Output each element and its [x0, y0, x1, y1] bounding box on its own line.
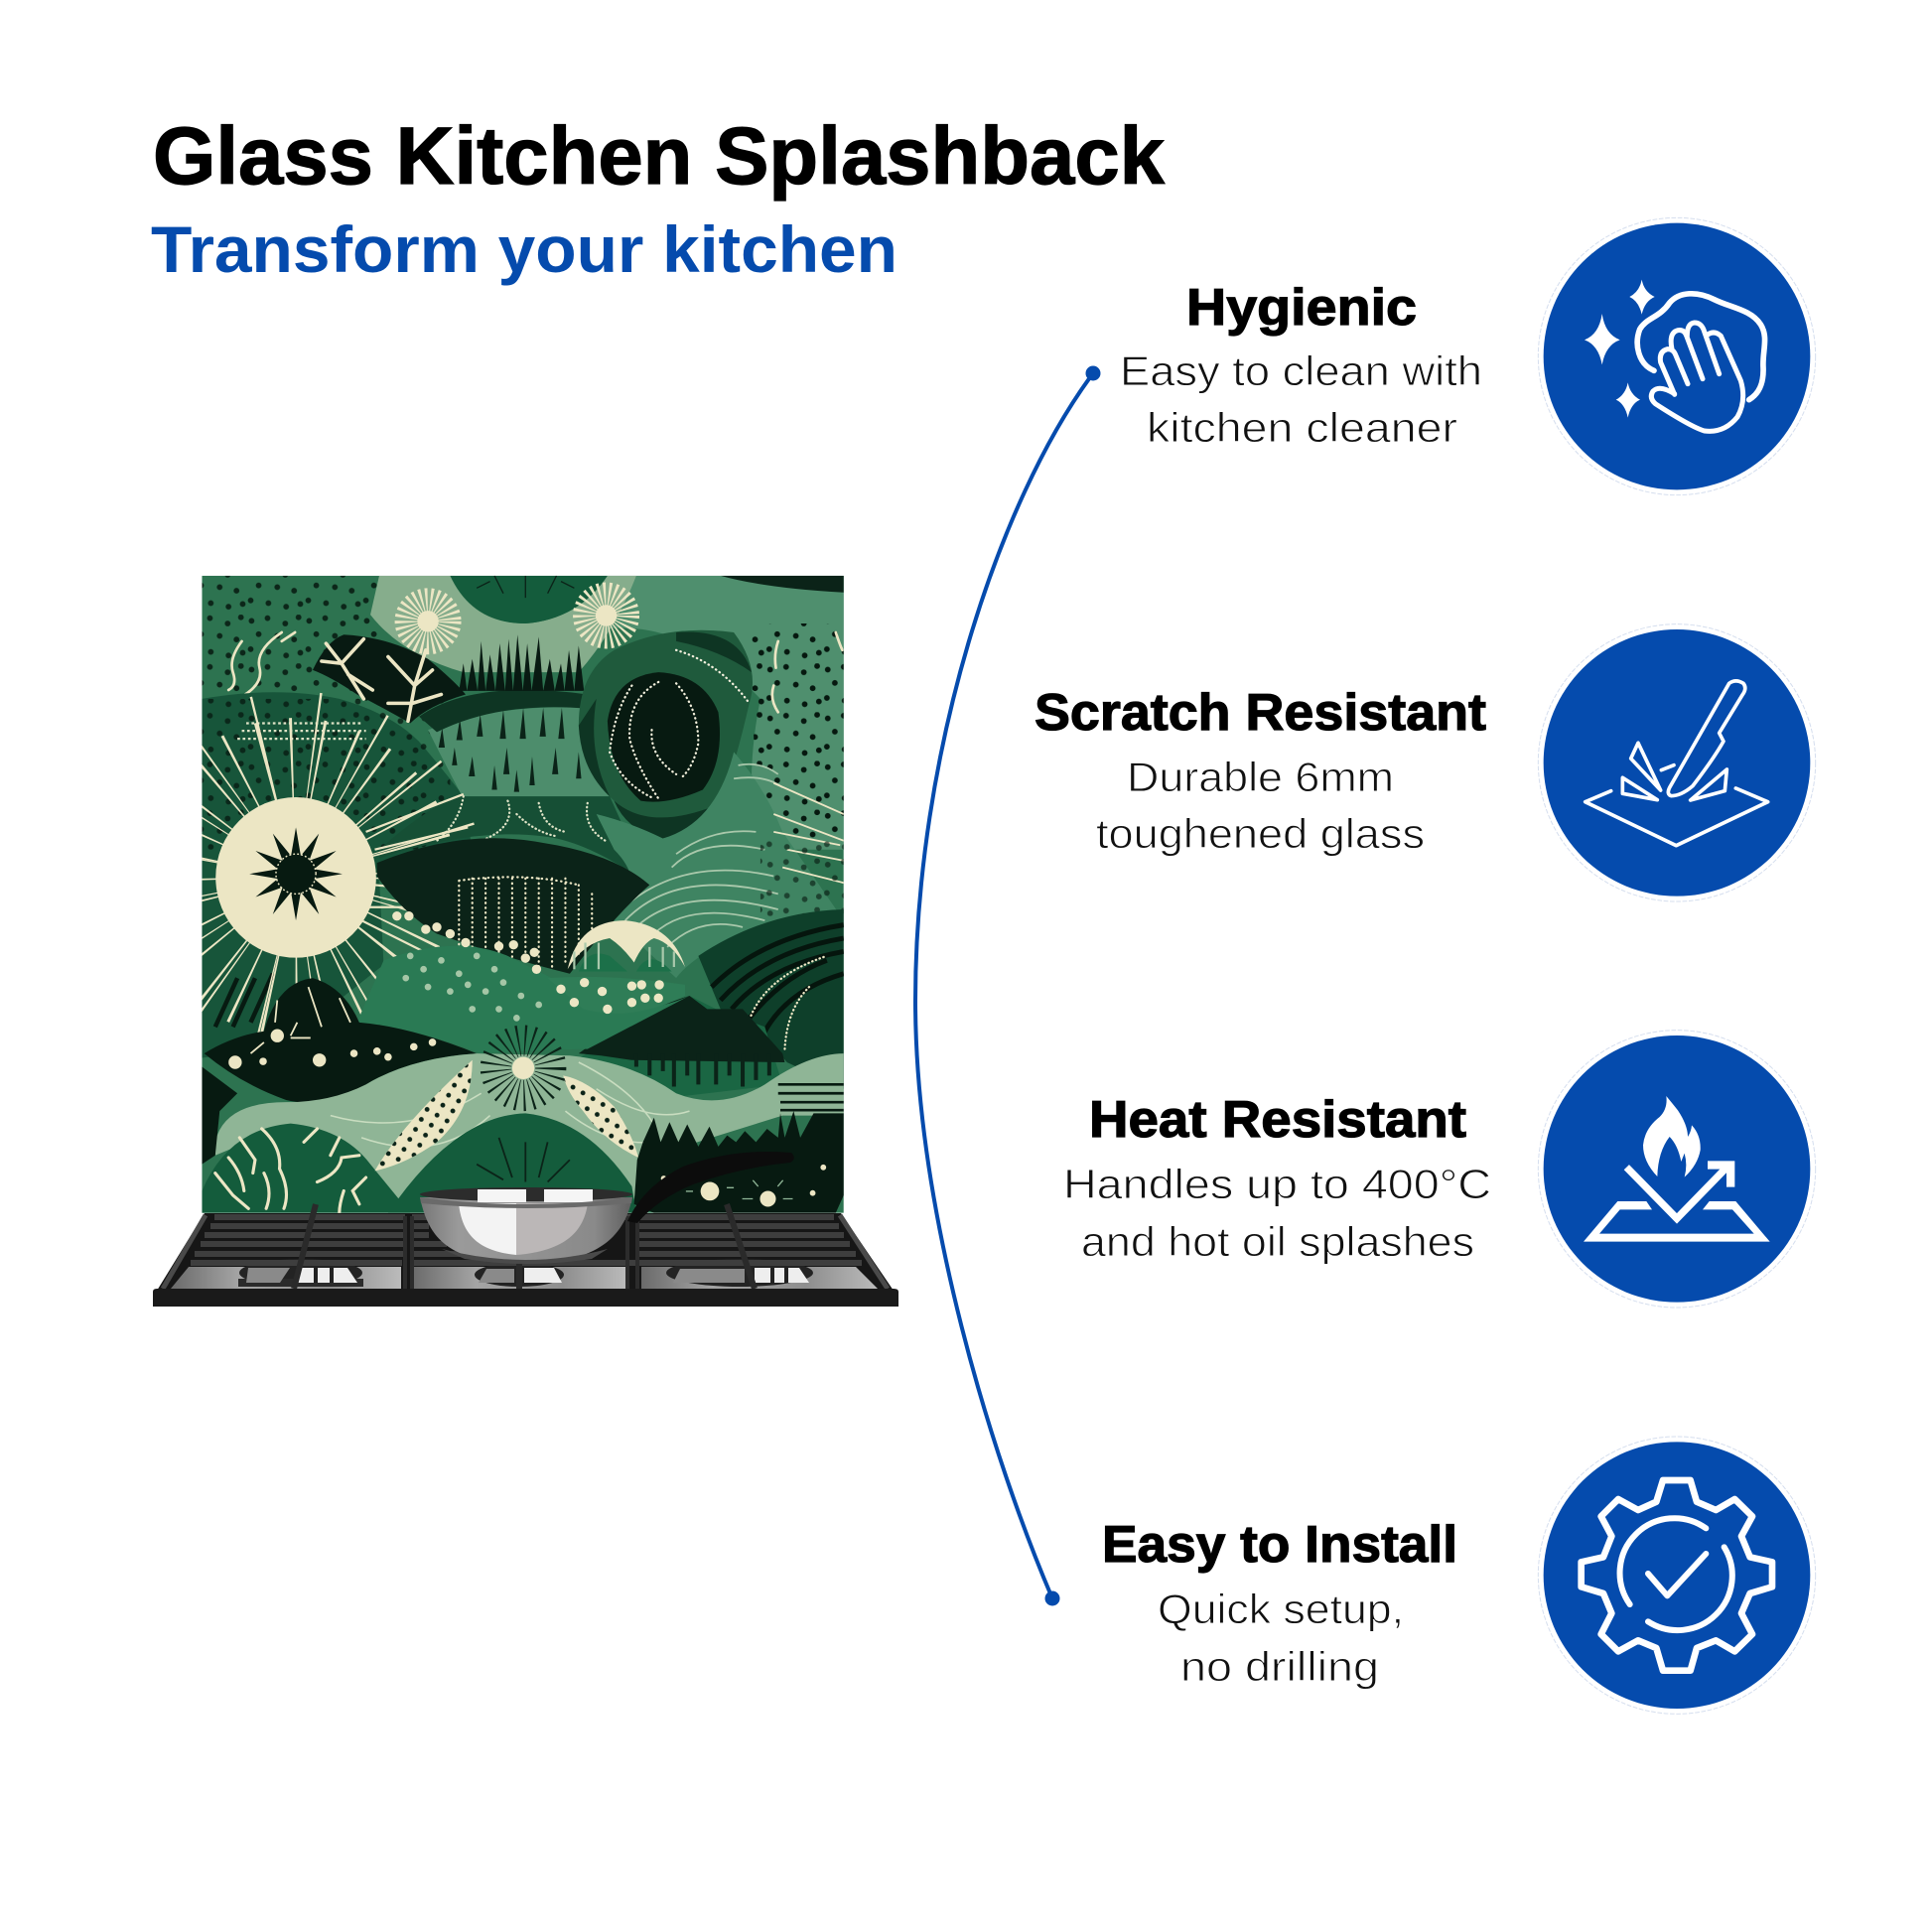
- front rail: [153, 1289, 898, 1307]
- right lower forest: [634, 1111, 844, 1213]
- feature: hygienic text: Easy to clean with: [1120, 347, 1482, 394]
- feature: hygienic text: [1120, 279, 1482, 451]
- feature: heat resistant text: Handles up to 400°C: [1063, 1161, 1491, 1207]
- dotted cream leaves: [375, 1060, 638, 1171]
- dark forest: [579, 996, 784, 1102]
- tree line: [459, 634, 584, 691]
- dotted green hill: [357, 916, 689, 1053]
- black leaf with branches: [313, 634, 466, 723]
- large sun: [215, 797, 376, 958]
- feature: scratch resistant text: toughened glass: [1096, 810, 1425, 857]
- sun star: [249, 827, 343, 920]
- icon: gear with check mark: [1538, 1437, 1816, 1714]
- large dark orb: [579, 630, 753, 839]
- pan reflections: [478, 1189, 593, 1202]
- feature: easy to install text: Quick setup,: [1158, 1586, 1404, 1632]
- black saucer hill: [205, 978, 477, 1102]
- feature: easy to install text: Easy to Install: [1102, 1516, 1457, 1574]
- central starburst: [495, 1040, 551, 1095]
- pan handle: [627, 1152, 794, 1223]
- glass splashback artwork: [163, 576, 844, 1213]
- left edge forest: [202, 1066, 237, 1165]
- panel: splashback product image: [153, 576, 898, 1307]
- feature: hygienic text: Hygienic: [1186, 279, 1417, 337]
- feature: heat resistant text: [1063, 1091, 1491, 1265]
- pan body: [420, 1197, 632, 1261]
- feature: scratch resistant text: [1035, 684, 1486, 857]
- burners: [238, 1259, 813, 1287]
- infographic canvas: [151, 123, 1817, 1715]
- connector arc: [915, 365, 1100, 1606]
- feature: heat resistant text: and hot oil splashes: [1081, 1218, 1474, 1265]
- deep green domes: [202, 1113, 636, 1213]
- small sun bursts: [407, 595, 627, 642]
- steel burner plates: [171, 1267, 878, 1289]
- feature: easy to install text: no drilling: [1180, 1643, 1379, 1690]
- cooktop with grates: [153, 1204, 898, 1307]
- sun rays: [163, 745, 468, 1011]
- frying pan: [420, 1152, 794, 1264]
- cream dome: [568, 920, 685, 971]
- icon: knife scratching glass: [1538, 624, 1816, 901]
- feature: scratch resistant text: Scratch Resistant: [1035, 684, 1486, 742]
- feature: scratch resistant text: Durable 6mm: [1127, 754, 1394, 800]
- title: Glass Kitchen Splashback: [153, 111, 1165, 202]
- sage wave: [215, 1053, 844, 1213]
- grate bars: [163, 1204, 888, 1289]
- icon: flame over glass: [1538, 1031, 1816, 1308]
- feature: heat resistant text: Heat Resistant: [1089, 1091, 1466, 1149]
- icon: hand wiping with sparkles: [1538, 217, 1816, 495]
- dark central band with dotted columns: [377, 838, 649, 974]
- feature: easy to install text: [1102, 1516, 1457, 1690]
- subtitle: Transform your kitchen: [151, 212, 897, 286]
- green wave region with arcs: [597, 753, 844, 978]
- feature: hygienic text: kitchen cleaner: [1147, 404, 1457, 451]
